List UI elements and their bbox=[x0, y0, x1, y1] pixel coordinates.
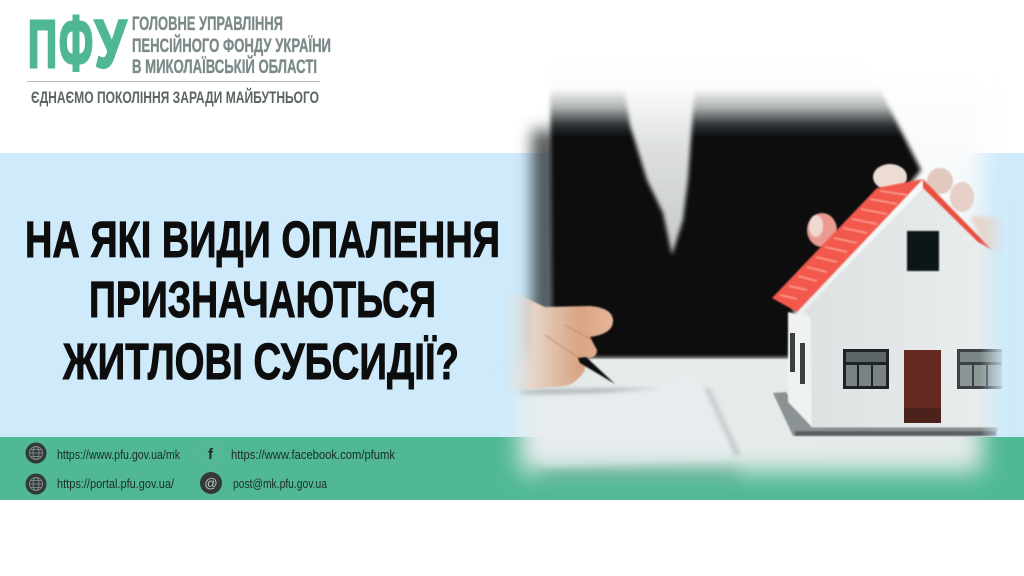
shirt bbox=[624, 91, 696, 256]
link: facebook: https://www.facebook.com/pfumk bbox=[231, 447, 395, 462]
roof bbox=[772, 179, 992, 312]
link: portal: https://portal.pfu.gov.ua/ bbox=[57, 476, 174, 491]
house side wall bbox=[788, 312, 812, 427]
left window bbox=[843, 349, 889, 389]
photo backdrop bbox=[502, 153, 1000, 490]
icon: globe bbox=[26, 442, 46, 464]
photo: hand and model house bbox=[502, 89, 1002, 490]
slogan: ЄДНАЄМО ПОКОЛІННЯ ЗАРАДИ МАЙБУТНЬОГО bbox=[31, 88, 319, 107]
side windows bbox=[790, 333, 805, 384]
fingers on roof bbox=[807, 164, 1003, 256]
logo mark ПФУ: У bbox=[95, 7, 127, 82]
organisation name: ПЕНСІЙНОГО ФОНДУ УКРАЇНИ bbox=[132, 35, 331, 57]
pen bbox=[578, 357, 615, 384]
house base bbox=[773, 392, 998, 436]
footer links bbox=[26, 442, 395, 494]
link: website: https://www.pfu.gov.ua/mk bbox=[57, 447, 180, 462]
green footer band bbox=[0, 437, 1024, 500]
jacket bbox=[550, 60, 921, 358]
table bbox=[590, 358, 788, 362]
icon: facebook: f bbox=[208, 446, 214, 463]
paper bbox=[520, 386, 741, 468]
icon: facebook bbox=[200, 442, 222, 464]
icon: email: @ bbox=[204, 476, 218, 490]
masked photo bbox=[502, 89, 1000, 490]
logo bbox=[28, 0, 331, 87]
jacket left fade bbox=[530, 130, 558, 355]
writing hand bbox=[500, 286, 613, 390]
icon: globe bbox=[26, 474, 46, 494]
blue band bbox=[0, 153, 1024, 437]
title: НА ЯКІ ВИДИ ОПАЛЕННЯ bbox=[25, 211, 500, 268]
link: email: post@mk.pfu.gov.ua bbox=[233, 476, 328, 491]
roof stripes bbox=[780, 191, 908, 299]
house front wall bbox=[803, 188, 1006, 427]
top window bbox=[907, 231, 939, 271]
organisation name bbox=[132, 14, 331, 78]
logo mark ПФУ: Ф bbox=[59, 0, 93, 87]
title: ЖИТЛОВІ СУБСИДІЇ? bbox=[62, 333, 459, 390]
logo mark ПФУ bbox=[28, 0, 127, 87]
title bbox=[25, 211, 500, 390]
organisation name: В МИКОЛАЇВСЬКІЙ ОБЛАСТІ bbox=[132, 56, 317, 78]
title: ПРИЗНАЧАЮТЬСЯ bbox=[89, 271, 436, 328]
right window bbox=[957, 349, 1002, 389]
right edge fade bbox=[980, 215, 1008, 437]
organisation name: ГОЛОВНЕ УПРАВЛІННЯ bbox=[132, 14, 283, 35]
door bbox=[904, 350, 941, 423]
icon: email bbox=[200, 472, 222, 494]
logo mark ПФУ: П bbox=[28, 7, 57, 82]
